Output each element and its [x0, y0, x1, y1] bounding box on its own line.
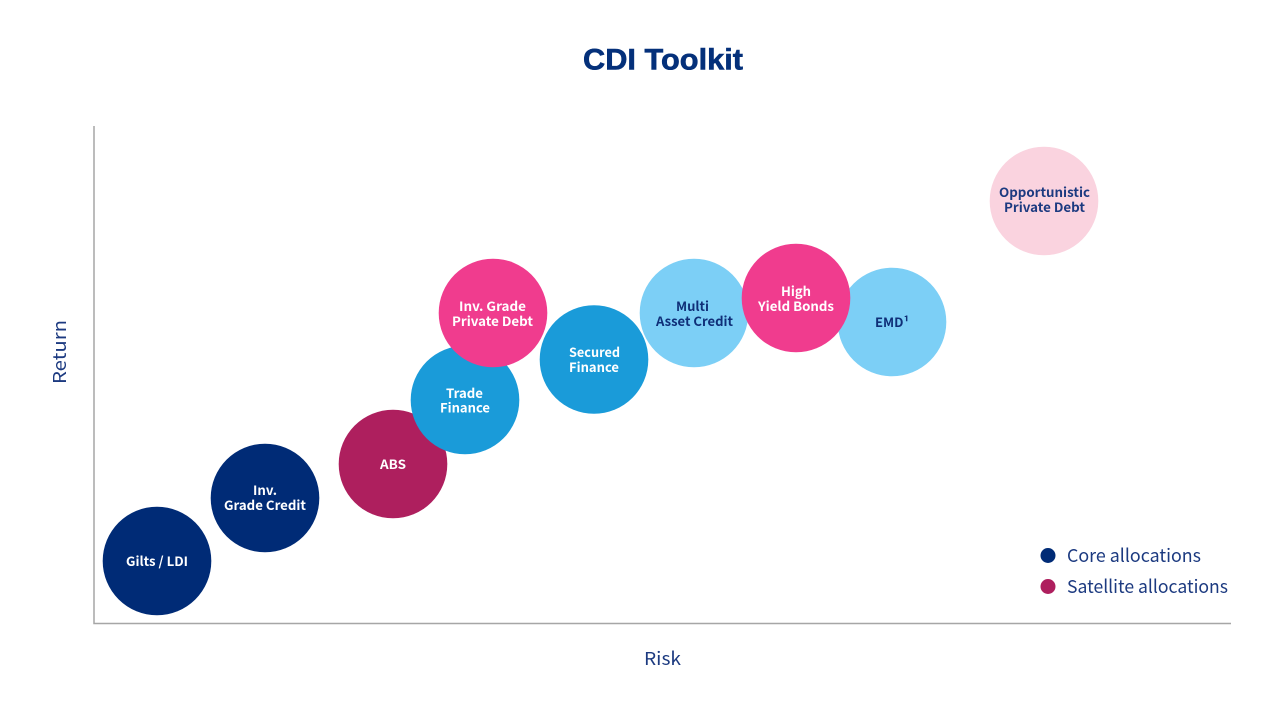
bubble: Secured Finance: Secured — [569, 342, 620, 361]
bubble: Trade Finance: Finance — [440, 398, 490, 416]
bubble: Opportunistic Private Debt — [990, 147, 1098, 255]
bubble: EMD: EMD¹ — [875, 312, 909, 331]
legend item: Satellite allocations: Satellite allocations — [1067, 573, 1228, 599]
bubble: ABS: ABS — [379, 454, 406, 473]
bubble: Trade Finance — [411, 346, 519, 454]
title: CDI Toolkit — [583, 44, 743, 76]
y-axis label: Return: Return — [46, 320, 72, 384]
bubble: Inv. Grade Private Debt: Private Debt — [452, 311, 534, 330]
bubble: Multi Asset Credit: Asset Credit — [655, 311, 734, 330]
legend item: Core allocations: Core allocations — [1067, 542, 1201, 568]
bubble: High Yield Bonds — [742, 244, 850, 352]
bubble: Inv. Grade Credit: Inv. — [253, 480, 277, 499]
bubble: Inv. Grade Private Debt: Inv. Grade — [459, 296, 526, 315]
bubble: Gilts / LDI: Gilts / LDI — [126, 551, 188, 570]
bubble: Multi Asset Credit — [640, 259, 748, 367]
bubble: High Yield Bonds: Yield Bonds — [757, 296, 834, 315]
bubble: Multi Asset Credit: Multi — [676, 296, 709, 315]
chart axes — [94, 126, 1231, 624]
bubble: Secured Finance: Finance — [569, 357, 619, 376]
bubble: Inv. Grade Credit: Grade Credit — [224, 495, 307, 514]
bubble: High Yield Bonds: High — [781, 281, 811, 300]
bubble: Opportunistic Private Debt: Private Debt — [1004, 197, 1086, 216]
bubble: Secured Finance — [540, 305, 648, 414]
bubble: ABS — [339, 410, 447, 518]
x-axis label: Risk: Risk — [644, 645, 681, 671]
bubble: Inv. Grade Private Debt — [439, 259, 547, 367]
bubble: EMD — [838, 268, 946, 376]
legend — [1040, 542, 1228, 599]
bubble: Inv. Grade Credit — [211, 444, 319, 552]
bubble: Gilts / LDI — [103, 507, 211, 615]
bubble: Opportunistic Private Debt: Opportunistic — [999, 182, 1090, 201]
bubble: Trade Finance: Trade — [446, 383, 483, 402]
